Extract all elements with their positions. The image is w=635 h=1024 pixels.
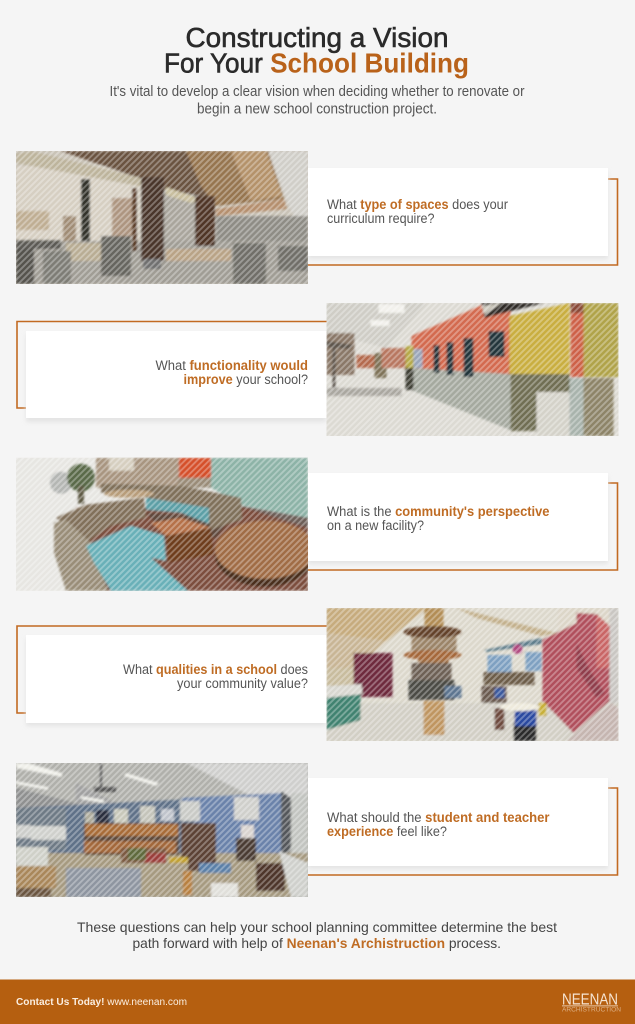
photo: lounge seating xyxy=(16,458,308,591)
question text 1: curriculum require? xyxy=(327,211,434,226)
card 1 xyxy=(308,168,608,256)
question text 5: experience feel like? xyxy=(327,824,447,839)
closing text: These questions can help your school planning committee determine the best xyxy=(77,919,557,935)
orange frame 4 xyxy=(17,626,326,713)
question text 5: What should the student and teacher xyxy=(327,810,550,825)
card shadow 5 xyxy=(308,781,608,869)
question text 5 xyxy=(327,810,550,839)
closing text xyxy=(77,919,557,951)
card 3 xyxy=(308,473,608,561)
logo: Neenan Archistruction: NEENAN xyxy=(562,992,618,1008)
photo: music classroom xyxy=(16,763,308,897)
card shadow 4 xyxy=(26,638,326,726)
orange frame 1 xyxy=(308,179,618,265)
orange frame 5 xyxy=(308,788,618,875)
panel: question 3 xyxy=(16,458,618,591)
panel: question 5 xyxy=(16,763,618,897)
question text 3: on a new facility? xyxy=(327,518,424,533)
contact line: Contact Us Today! www.neenan.com xyxy=(16,997,187,1008)
intro text: begin a new school construction project. xyxy=(197,102,437,118)
card 4 xyxy=(26,635,326,723)
closing text: path forward with help of Neenan's Archistruction process. xyxy=(132,935,501,951)
question text 4: your community value? xyxy=(177,676,308,691)
card shadow 1 xyxy=(308,171,608,259)
intro text: It's vital to develop a clear vision when deciding whether to renovate or xyxy=(110,84,525,100)
panel: question 4 xyxy=(17,608,618,741)
question text 4 xyxy=(123,662,308,691)
question text 4: What qualities in a school does xyxy=(123,662,308,677)
footer banner xyxy=(0,980,635,1024)
question text 2 xyxy=(156,358,308,387)
question text 1: What type of spaces does your xyxy=(327,197,508,212)
title: Constructing a Vision xyxy=(186,22,448,53)
orange frame 2 xyxy=(17,322,326,408)
photo: school hallway xyxy=(326,303,618,436)
question text 3: What is the community's perspective xyxy=(327,504,550,519)
orange frame 3 xyxy=(308,483,618,570)
question text 2: improve your school? xyxy=(184,372,308,387)
question text 3 xyxy=(327,504,550,533)
logo: Neenan Archistruction: ARCHISTRUCTION xyxy=(562,1008,621,1014)
question text 1 xyxy=(327,197,508,226)
panel: question 1 xyxy=(16,151,618,284)
card shadow 3 xyxy=(308,476,608,564)
photo: media center xyxy=(326,608,618,741)
intro text xyxy=(110,84,525,118)
title: For Your School Building xyxy=(164,48,469,78)
panel: question 2 xyxy=(17,303,618,436)
card 5 xyxy=(308,778,608,866)
title xyxy=(164,22,469,78)
card 2 xyxy=(26,331,326,418)
card shadow 2 xyxy=(26,334,326,422)
question text 2: What functionality would xyxy=(156,358,308,373)
photo: cafe seating xyxy=(16,151,308,284)
